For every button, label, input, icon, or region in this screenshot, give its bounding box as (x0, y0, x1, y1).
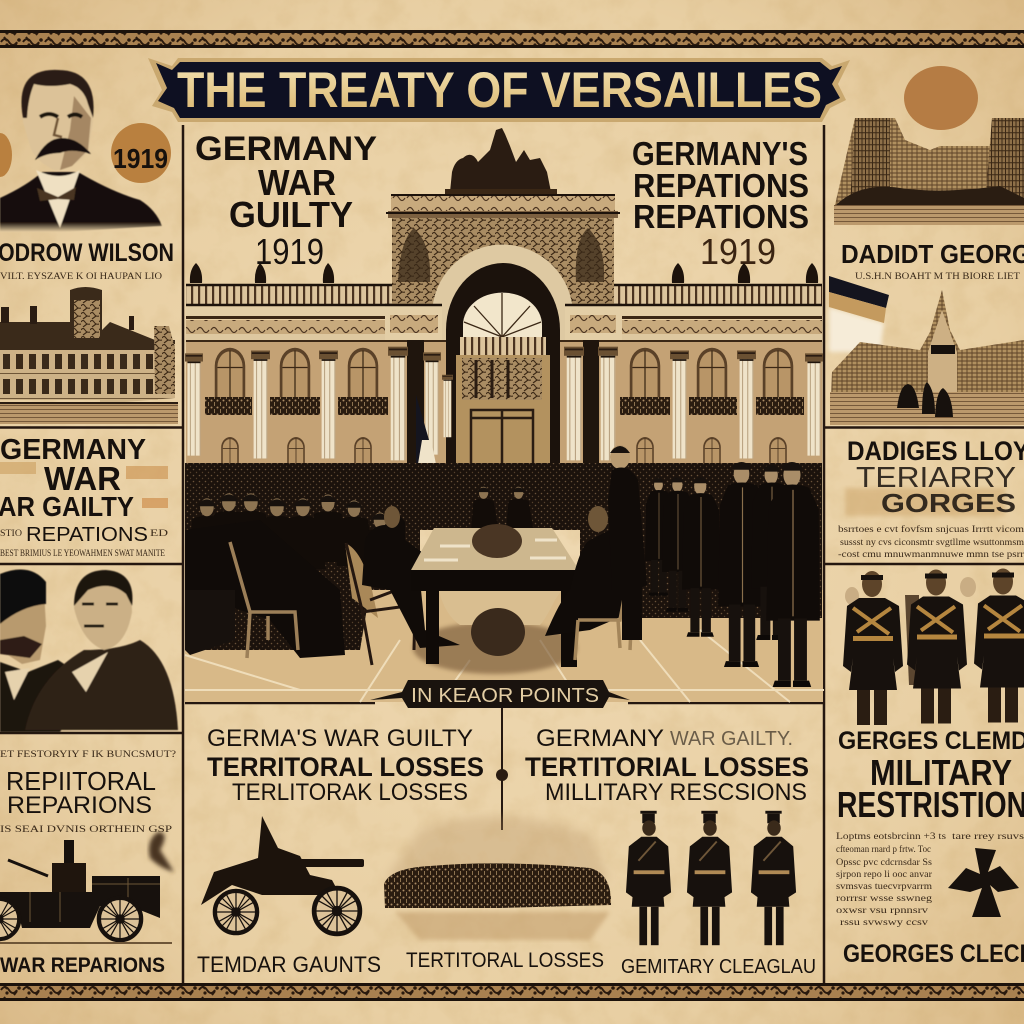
entablature (186, 307, 822, 342)
bottom captions: GEMITARY CLEAGLAU (621, 956, 816, 978)
text block: reparations: IS SEAI DVNIS ORTHEIN GSP (0, 824, 172, 834)
heading: Germany's reparations: REPATIONS (633, 198, 809, 235)
facade wall (186, 340, 822, 466)
text block: territorial losses left: TERRITORAL LOSSES (207, 752, 484, 782)
small caption: VILT. EYSZAVE K OI HAUPAN LIO (0, 271, 163, 281)
text block: territorial losses right: GERMANY (536, 725, 664, 752)
windows (205, 348, 804, 466)
text block: Germany war guilt: STIO (0, 528, 23, 538)
text block: reparations: REPIITORAL (6, 766, 156, 796)
bottom captions (197, 949, 816, 978)
heading: Germany war guilty: GERMANY (195, 130, 377, 168)
text block: Germany war guilt: ED (150, 528, 169, 538)
text block: Germany war guilt: BEST BRIMIUS LE YEOWAHMEN SWAT MANITE (0, 548, 165, 558)
heading: Germany war guilty: GUILTY (229, 194, 353, 235)
coin partial left (0, 133, 12, 177)
small print column: sjrpon repo li ooc anvar (836, 869, 932, 879)
text block: territorial losses left (207, 725, 484, 806)
small caption: U.S.H.N BOAHT M TH BIORE LIET (855, 271, 1021, 281)
text block: Germany war guilt (0, 434, 169, 558)
standing official (608, 445, 647, 640)
front chair left (345, 543, 415, 665)
heading: Germany's reparations (632, 135, 809, 272)
text block: Lloyd George: sussst ny cvs ciconsmtr svgtllme wsuttonmsm (840, 537, 1024, 547)
text block: military restrictions (837, 727, 1024, 825)
flag (829, 276, 889, 352)
year badge: 1919: 1919 (113, 143, 168, 174)
table flowers (472, 524, 522, 558)
illustration: three officers (843, 568, 1024, 725)
text block: territorial losses left: GERMA'S WAR GUILTY (207, 725, 473, 752)
attic block (386, 189, 620, 310)
balustrade (186, 263, 822, 305)
panel frame lines left (0, 428, 182, 733)
right delegate (545, 506, 635, 660)
text block: Lloyd George: TERIARRY (856, 462, 1016, 494)
columns (185, 340, 823, 466)
text block: Germany war guilt: AR GAILTY (0, 491, 134, 522)
small print column: rssu svwswy ccsv (840, 917, 929, 927)
divider with medallion (496, 708, 508, 830)
text block: territorial losses left: TERLITORAK LOSSES (232, 779, 468, 806)
heading: Germany war guilty: 1919 (255, 231, 324, 272)
text block: reparations: ET FESTORYIY F IK BUNCSMUT? (0, 749, 176, 759)
heading: Germany's reparations: REPATIONS (633, 167, 809, 204)
icon: emblem (948, 848, 1019, 917)
illustration: town hall (830, 290, 1024, 425)
name label: ODROW WILSON (0, 239, 174, 267)
central arch (385, 245, 622, 466)
text block: reparations: REPARIONS (7, 792, 152, 819)
text block: territorial losses right (525, 725, 809, 806)
illustration: three soldiers (626, 811, 796, 945)
top ornamental border (0, 30, 1024, 48)
heading: Germany's reparations: GERMANY'S (632, 135, 808, 172)
rooftop sculpture (450, 128, 551, 192)
standing delegates right (645, 462, 820, 687)
bottom ornamental border (0, 983, 1024, 1001)
small print column: cfteoman rnard p frtw. Toc (836, 844, 931, 854)
heading: Germany's reparations: 1919 (700, 231, 776, 272)
text block: Germany war guilt: GERMANY (0, 434, 146, 466)
small print column: rorrrsr wsse sswneg (836, 893, 933, 903)
illustration: palace of Versailles (185, 128, 823, 466)
heading: Germany war guilty: WAR (258, 162, 336, 203)
bottom captions: TERTITORAL LOSSES (406, 949, 604, 972)
panel: centre column frame (183, 125, 824, 983)
floor (185, 590, 824, 702)
banner: title (148, 58, 850, 122)
text block: territorial losses right: WAR GAILTY. (670, 728, 793, 750)
title text: THE TREATY OF VERSAILLES (177, 62, 822, 118)
year badge: 1919 (111, 123, 171, 183)
text block: Lloyd George (838, 436, 1024, 559)
panel: left column (0, 70, 182, 977)
small print column: svmsvas tuecvrpvarrm (836, 881, 932, 891)
portrait: Woodrow Wilson (0, 70, 165, 232)
heading: Germany war guilty (195, 130, 377, 272)
bottom captions: TEMDAR GAUNTS (197, 952, 381, 977)
illustration: palace (834, 118, 1024, 225)
panel: right column (825, 66, 1024, 968)
panel: central scene (185, 128, 824, 978)
panel frame line right (825, 428, 1024, 564)
illustration: field gun (201, 816, 364, 934)
pier blocks (385, 305, 622, 340)
text block: Germany war guilt: WAR (44, 460, 121, 497)
crowd mass (185, 463, 822, 650)
small print column: Opssc pvc cdcrnsdar Ss (836, 857, 933, 867)
portrait: two men (0, 570, 178, 732)
bottom label: war reparations: WAR REPARIONS (0, 954, 165, 977)
banner: key points: IN KEAOR POINTS (411, 685, 599, 707)
small print column: Loptms eotsbrcinn +3 ts (836, 831, 947, 841)
text block: territorial losses right: TERTITORIAL LOSSES (525, 752, 809, 782)
small print column: oxwsr vsu rpnnsrv (836, 905, 929, 915)
signing table (411, 528, 579, 667)
illustration: armoured truck (0, 832, 174, 944)
medallion (904, 66, 978, 130)
small print column (836, 831, 1024, 927)
illustration: massed troops (384, 816, 611, 940)
banner: key points (370, 680, 630, 708)
front delegate (362, 510, 460, 648)
illustration: building (0, 287, 178, 424)
floor flowers (471, 608, 525, 656)
text block: territorial losses right: MILLITARY RESCSIONS (545, 779, 807, 806)
text block: Germany war guilt: REPATIONS (26, 524, 148, 546)
text block: reparations (0, 749, 176, 834)
illustration: signing ceremony crowd (185, 445, 822, 687)
text block: Lloyd George: -cost cmu mnuwmanmnuwe mmn tse psrr (838, 549, 1024, 559)
text block: Lloyd George: GORGES (881, 488, 1016, 518)
flag on facade (416, 395, 436, 464)
left chair (230, 542, 298, 658)
small print column: tare rrey rsuvs (952, 831, 1024, 841)
seated delegates left (185, 487, 534, 658)
text block: Lloyd George: bsrrtoes e cvt fovfsm snjcuas Irrrtt vicom (838, 524, 1024, 534)
